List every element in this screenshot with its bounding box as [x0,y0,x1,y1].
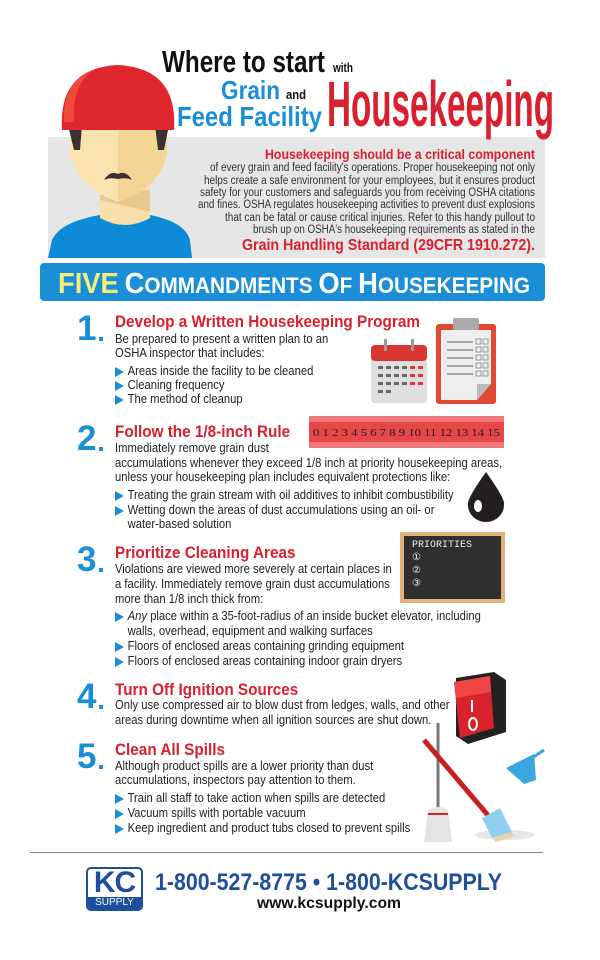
section 3: Floors of enclosed areas containing indoor grain dryers [128,654,402,668]
section 4 [115,680,450,726]
section 2: Follow the 1/8-inch Rule [115,422,290,441]
section 5: Clean All Spills [115,740,225,759]
section 4: areas during downtime when all ignition sources are shut down. [115,712,431,726]
section 1: Cleaning frequency [128,378,225,392]
title: with [332,60,353,75]
icon: red switch [454,672,506,744]
section 5: Although product spills are a lower priority than dust [115,758,373,772]
icon: clipboard [436,318,496,404]
section 1: Develop a Written Housekeeping Program [115,312,420,331]
section 1 [115,312,420,406]
section 3: walls, overhead, equipment and walking surfaces [128,624,373,638]
section 3: more than 1/8 inch thick from: [115,592,263,606]
section 3: Floors of enclosed areas containing grinding equipment [128,638,404,652]
icon: ruler: 0 1 2 3 4 5 6 7 8 9 10 11 12 13 14 15 [313,427,501,439]
section 5: Vacuum spills with portable vacuum [128,806,306,820]
section 5: accumulations, inspectors pay attention to them. [115,772,356,786]
section 5 [115,740,410,834]
title: and [286,87,306,102]
icon: oil drop [468,472,504,522]
footer contact: www.kcsupply.com [256,895,401,912]
icon: chalkboard [400,532,505,603]
section 1: OSHA inspector that includes: [115,346,264,360]
icon: chalkboard: PRIORITIES [412,540,472,551]
icon: chalkboard: ③ [412,579,421,590]
section 2: unless your housekeeping plan includes equivalent protections like: [115,470,450,484]
section 3 [115,543,481,668]
section 2 [115,422,502,530]
section 2: water-based solution [128,516,231,530]
number 2: 2 [77,419,96,458]
footer logo: SUPPLY [95,897,134,908]
icon: chalkboard: ① [412,553,421,564]
title: Grain [221,75,280,105]
section 3: a facility. Immediately remove grain dust accumulations [115,576,390,590]
section 2: Treating the grain stream with oil additives to inhibit combustibility [128,488,454,502]
illustration: worker [48,65,192,258]
title [162,44,554,140]
section 3: Prioritize Cleaning Areas [115,543,296,562]
number 4: 4 [77,677,96,716]
section 4: Turn Off Ignition Sources [115,680,298,699]
intro text [198,146,536,254]
intro gray panel [48,137,545,258]
section 1: Areas inside the facility to be cleaned [128,364,313,378]
title: Where to start [162,44,325,79]
number 1: 1 [77,309,96,348]
number 3: 3 [77,540,96,579]
icon: calendar [371,339,427,403]
section 5: Keep ingredient and product tubs closed to prevent spills [128,820,410,834]
title: Feed Facility [177,101,322,132]
section 2: Immediately remove grain dust [115,440,269,454]
section 1: The method of cleanup [128,392,243,406]
section 3: Any place within a 35-foot-radius of an inside bucket elevator, including [128,608,481,622]
number 5: 5 [77,737,96,776]
section 3: Violations are viewed more severely at certain places in [115,562,392,576]
icon: mop broom and dustpan [422,723,545,842]
section 1: Be prepared to present a written plan to an [115,332,328,346]
section 2: accumulations whenever they exceed 1/8 inch at priority housekeeping areas, [115,456,502,470]
section 4: Only use compressed air to blow dust from ledges, walls, and other [115,698,450,712]
footer logo [86,867,143,911]
icon: chalkboard: ② [412,566,421,577]
banner: FIVE COMMANDMENTS OF HOUSEKEEPING [58,268,530,300]
section 2: Wetting down the areas of dust accumulations using an oil- or [128,502,434,516]
footer contact [155,869,502,912]
icon: ruler [309,416,504,448]
section 5: Train all staff to take action when spills are detected [128,790,385,804]
